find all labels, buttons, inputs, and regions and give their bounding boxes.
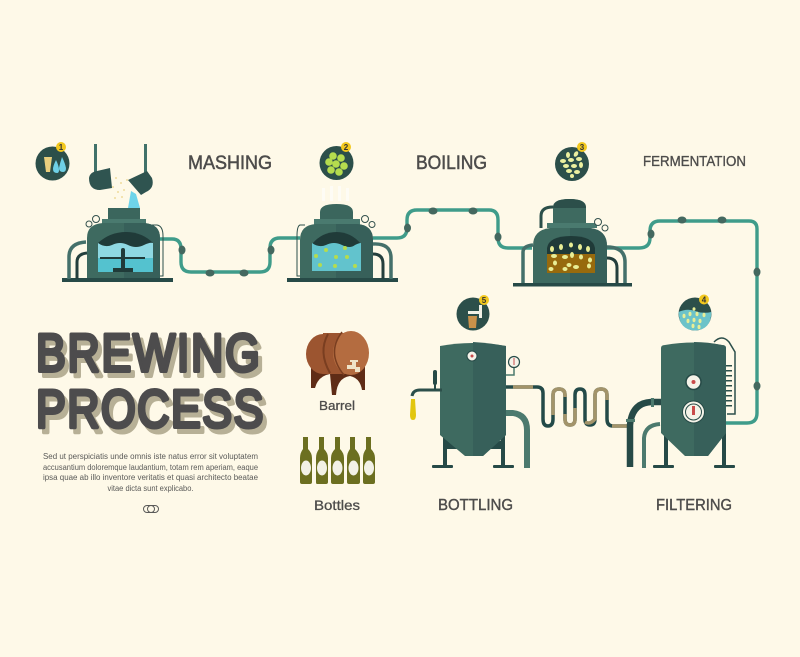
illustration: bottles xyxy=(300,437,375,484)
icon: step 1 malt and water: 1 xyxy=(59,143,64,152)
icon: step 4 filter: 4 xyxy=(702,296,707,304)
title: PROCESS xyxy=(40,385,269,444)
pipe: boiling to fermentation xyxy=(373,208,532,248)
icon: small logo mark xyxy=(144,506,158,512)
heading: fermentation: FERMENTATION xyxy=(643,154,746,170)
icon: step 5 tap and beer: 5 xyxy=(482,296,487,305)
icon: step 3 yeast: 3 xyxy=(580,143,585,152)
icon: step 5 tap and beer xyxy=(456,295,490,330)
illustration: fermentation tank xyxy=(513,199,632,286)
label: barrel: Barrel xyxy=(319,398,355,413)
text block: description: accusantium doloremque laudantium, totam rem aperiam, eaque xyxy=(43,463,258,472)
title: BREWING xyxy=(36,324,262,383)
icon: step 3 yeast xyxy=(555,142,589,181)
illustration: mashing tank xyxy=(62,208,173,282)
title: BREWING xyxy=(40,329,266,388)
icon: step 1 malt and water xyxy=(36,142,70,180)
illustration: boiling tank xyxy=(287,204,398,282)
illustration: barrel xyxy=(306,331,369,395)
icon: step 2 hops xyxy=(320,142,354,180)
icon: step 4 filter xyxy=(678,294,712,330)
heading: bottling: BOTTLING xyxy=(438,497,513,514)
text block: description: ipsa quae ab illo inventore veritatis et quasi architecto beatae xyxy=(43,473,258,482)
title: PROCESS xyxy=(36,380,265,439)
illustration: filtering tank xyxy=(626,338,735,468)
illustration: ingredient hoppers xyxy=(89,144,153,208)
heading: boiling: BOILING xyxy=(416,153,487,174)
text block: description: vitae dicta sunt explicabo. xyxy=(108,484,194,493)
illustration: coil pipe xyxy=(506,387,630,426)
heading: mashing: MASHING xyxy=(188,153,272,174)
icon: step 2 hops: 2 xyxy=(344,143,349,152)
illustration: bottling tank xyxy=(410,342,530,468)
illustration: steam xyxy=(322,186,349,201)
label: bottles: Bottles xyxy=(314,497,360,513)
pipe: fermentation to filtering xyxy=(607,216,760,423)
title xyxy=(36,324,269,444)
text block: description xyxy=(43,452,258,493)
text block: description: Sed ut perspiciatis unde omnis iste natus error sit voluptatem xyxy=(43,452,258,461)
pipe: mashing to boiling xyxy=(160,238,300,276)
heading: filtering: FILTERING xyxy=(656,497,732,514)
